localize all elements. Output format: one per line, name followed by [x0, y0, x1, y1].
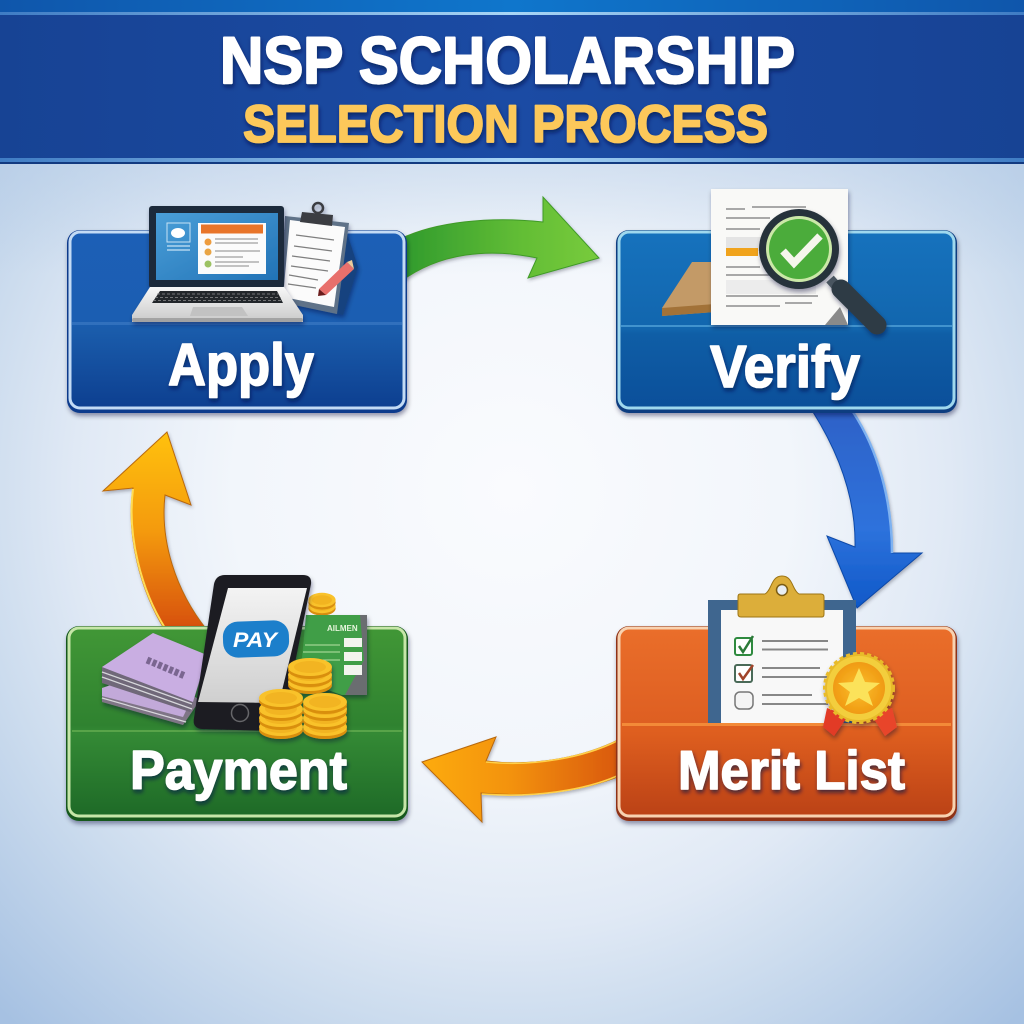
subtitle line 2: SELECTION PROCESS [243, 95, 768, 154]
arrow: merit list to payment [422, 737, 620, 822]
panel: merit list [616, 576, 957, 821]
icon: document [711, 189, 848, 325]
icon: clipboard and pencil [280, 203, 358, 315]
panel: apply [67, 203, 407, 413]
title line 1: NSP SCHOLARSHIP [220, 23, 795, 97]
icon: laptop [132, 206, 303, 322]
header banner [0, 0, 1024, 164]
icon: gold medal [823, 654, 897, 736]
icon: gold coins [259, 658, 347, 739]
pay button text: PAY [233, 629, 279, 652]
icon: coins behind phone [308, 593, 336, 616]
icon: magnifier with check [759, 209, 877, 325]
arrow: apply to verify [400, 197, 599, 282]
icon: cash stacks [102, 633, 207, 725]
icon: smartphone [194, 575, 311, 731]
panel: verify [616, 189, 957, 413]
icon: green receipt: AILMEN [327, 624, 358, 633]
label: payment: Payment [130, 739, 347, 801]
label: verify: Verify [710, 334, 860, 400]
label: merit list: Merit List [678, 739, 905, 801]
panel: payment [66, 575, 408, 821]
icon: clipboard checklist [708, 576, 856, 724]
icon: folder [662, 262, 715, 316]
arrow: verify to merit list [813, 412, 922, 608]
label: apply: Apply [168, 332, 314, 398]
icon: green receipt [300, 615, 367, 695]
arrow: payment to apply [103, 432, 207, 630]
panel fold highlight [622, 723, 951, 726]
